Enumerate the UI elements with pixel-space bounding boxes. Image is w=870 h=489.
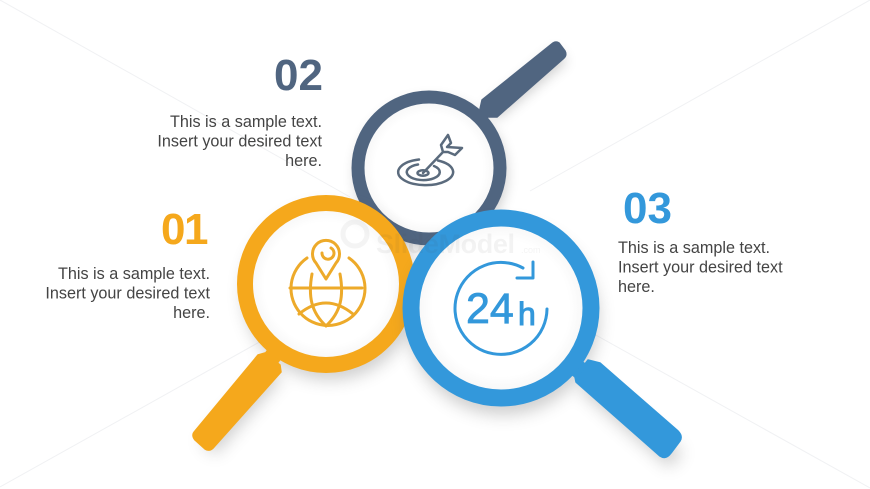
icon: globe with location pin: [290, 240, 365, 326]
block 02: [157, 51, 323, 170]
icon: 24 hour clock arrow: [455, 262, 547, 354]
icon: 24 hour clock arrow: h: [518, 296, 536, 332]
text 01: This is a sample text.: [58, 265, 210, 283]
handle: [193, 353, 281, 450]
shadow: [407, 223, 676, 460]
neck: [501, 308, 582, 372]
number 02: 02: [274, 51, 323, 100]
number 01: 1: [184, 205, 208, 254]
text 02: Insert your desired text: [157, 132, 322, 150]
handle: [575, 360, 681, 457]
number 01: 0: [161, 205, 185, 254]
text 03: Insert your desired text: [618, 258, 783, 276]
magnifier 02: slate: [355, 42, 566, 250]
handle: [429, 42, 566, 168]
text 03: This is a sample text.: [618, 239, 770, 257]
lens ring: [358, 97, 500, 239]
text 02: here.: [285, 152, 322, 170]
neck: [270, 284, 326, 360]
text 02: This is a sample text.: [170, 113, 322, 131]
block 01: [45, 205, 210, 322]
text 03: here.: [618, 278, 655, 296]
text 01: here.: [173, 304, 210, 322]
shadow: [355, 55, 561, 250]
icon: 24 hour clock arrow: 24: [466, 285, 514, 333]
watermark: [343, 222, 541, 259]
magnifier 01: amber: [193, 203, 417, 450]
block 03: [618, 184, 783, 296]
lens ring: [245, 203, 407, 365]
shadow: [208, 206, 417, 448]
icon: target with arrow: [398, 135, 462, 185]
lens ring: [411, 218, 591, 398]
watermark: SlideModel: [376, 229, 515, 259]
magnifier 03: blue: [407, 218, 681, 460]
text 01: Insert your desired text: [45, 284, 210, 302]
number 03: 03: [623, 184, 672, 233]
watermark: .com: [521, 245, 541, 255]
